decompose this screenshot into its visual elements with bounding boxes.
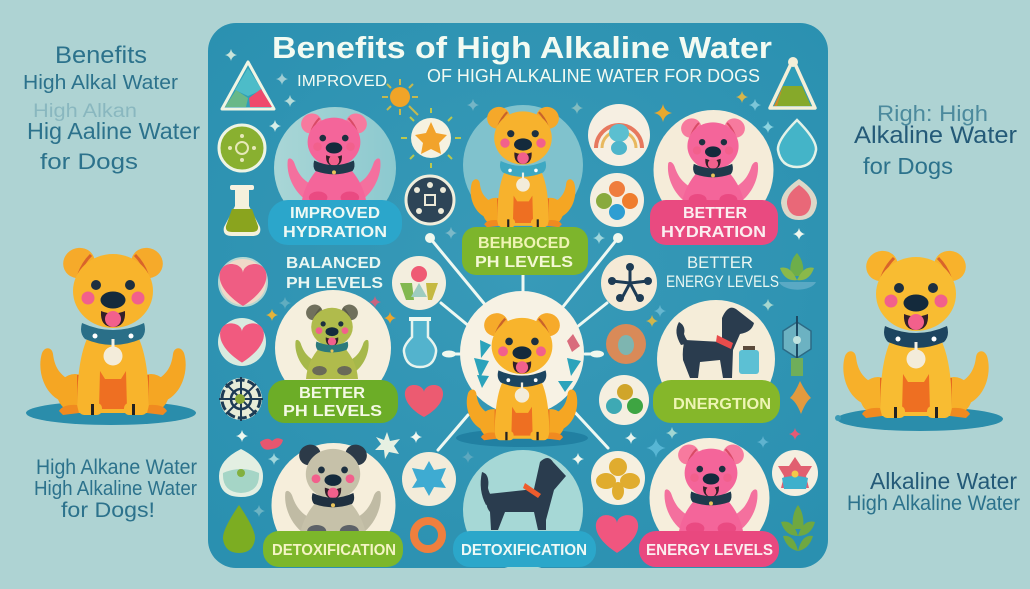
side text: right top: for Dogs [863, 153, 953, 179]
icon: red wave [260, 438, 283, 450]
side text: right bottom [847, 468, 1020, 515]
panel: detoxification black dog [453, 450, 596, 570]
icon: blue flask [404, 317, 436, 367]
panel: energy black dog: DNERGTION [673, 396, 771, 413]
side text: right top: Righ: High [877, 101, 988, 126]
icon: triangle flask left [222, 62, 274, 109]
panel: enhanced pH levels [462, 103, 588, 275]
icon: star circle [772, 450, 818, 496]
side text: left top: Benefits [55, 42, 147, 69]
icon: target wheel [219, 377, 263, 421]
icon: dark molecule circle [406, 176, 454, 224]
side text: left bottom: High Alkane Water [36, 456, 197, 479]
black dog [481, 458, 566, 530]
side text: left top: for Dogs [40, 149, 138, 174]
icon: star badge [401, 108, 461, 168]
side text: right top [854, 101, 1017, 179]
icon: tree circle [392, 256, 446, 310]
label: balanced pH levels: BALANCED [286, 255, 381, 272]
icon: sun [382, 79, 418, 115]
main panel [208, 23, 828, 568]
label: balanced pH levels: PH LEVELS [286, 275, 383, 292]
label: better energy levels: ENERGY LEVELS [666, 272, 779, 291]
central dog [456, 291, 588, 447]
side dog [676, 308, 754, 378]
panel: energy levels pink dog [639, 438, 779, 567]
panel: better pH levels [268, 290, 398, 423]
side text: right bottom: High Alkaline Water [847, 492, 1020, 515]
pink dog right [668, 115, 758, 210]
panel: improved hydration: IMPROVED [290, 205, 380, 222]
panel: enhanced pH levels: PH LEVELS [475, 254, 573, 271]
icon: green bars [791, 358, 803, 376]
icon: hex gadget [783, 316, 811, 364]
side text: left bottom: High Alkaline Water [34, 478, 197, 500]
left dog [26, 243, 196, 425]
panel: detoxification grey dog [263, 441, 403, 567]
right dog [837, 246, 1003, 431]
connector lines [430, 238, 618, 450]
icon: orange blob [606, 324, 646, 364]
small dot [835, 415, 841, 421]
icon: bottom leaves [781, 505, 815, 551]
side text: right top: Alkaline Water [854, 122, 1017, 149]
icon: flower circle [591, 451, 645, 505]
panel: detoxification grey dog: DETOXIFICATION [272, 542, 396, 559]
icon: heart circle [218, 318, 266, 366]
icon: dots circle [590, 173, 644, 227]
panel: detoxification black dog: DETOXIFICATION [461, 542, 587, 559]
panel: better hydration: HYDRATION [661, 224, 766, 241]
icon: molecule circle [601, 255, 657, 311]
icon: rainbow circle [588, 104, 650, 166]
grey dog [285, 441, 381, 542]
panel: better hydration [650, 110, 778, 245]
icon: leaves top right [779, 253, 816, 290]
connector dots [425, 233, 623, 358]
label: better energy levels [666, 253, 779, 291]
olive dog [295, 302, 369, 379]
icon: right triangle flask [770, 57, 815, 108]
icon: pink heart [596, 515, 638, 553]
pink dog [288, 110, 380, 208]
icon: three balls circle [599, 375, 649, 425]
side text: left top: High Alkan [33, 101, 137, 122]
side text: left bottom: for Dogs! [61, 499, 155, 522]
icon: red drop circle [781, 179, 817, 220]
subtitle right: OF HIGH ALKALINE WATER FOR DOGS [427, 66, 760, 86]
icon: green drop [223, 505, 255, 553]
side text: left top: Hig Aaline Water [27, 118, 200, 144]
icon: white splat [375, 432, 400, 459]
panel: energy levels pink dog: ENERGY LEVELS [646, 542, 773, 559]
side text: left top: High Alkal Water [23, 72, 178, 94]
side text: left top [23, 42, 200, 174]
icon: pink blob circle [219, 258, 267, 306]
icon: maple circle [402, 452, 456, 506]
icon: red heart [405, 385, 443, 417]
panel: improved hydration: HYDRATION [283, 224, 387, 241]
subtitle left: IMPROVED [297, 73, 387, 90]
label: better energy levels: BETTER [687, 253, 753, 272]
panel: enhanced pH levels: BEHBOCED [478, 235, 570, 252]
title: Benefits of High Alkaline Water [272, 30, 772, 65]
yellow dog top [471, 103, 575, 227]
panel: better pH levels: BETTER [299, 385, 365, 402]
icon: green teal droplet [219, 449, 263, 497]
icon: water drop [778, 120, 816, 167]
panel: improved hydration [268, 107, 402, 245]
panel: better pH levels: PH LEVELS [283, 403, 382, 420]
pink dog bottom [665, 441, 757, 539]
icon: orange leaf [790, 381, 811, 414]
icon: donut [414, 521, 442, 549]
icon: green circle [219, 125, 265, 171]
icon: yellow flask [224, 185, 260, 236]
jar [739, 346, 759, 374]
label: balanced pH levels [286, 255, 383, 292]
panel: energy black dog [653, 300, 780, 423]
panel: better hydration: BETTER [683, 205, 747, 222]
side text: left bottom [34, 456, 197, 522]
side text: right bottom: Alkaline Water [870, 468, 1017, 494]
sparkles [225, 49, 805, 517]
